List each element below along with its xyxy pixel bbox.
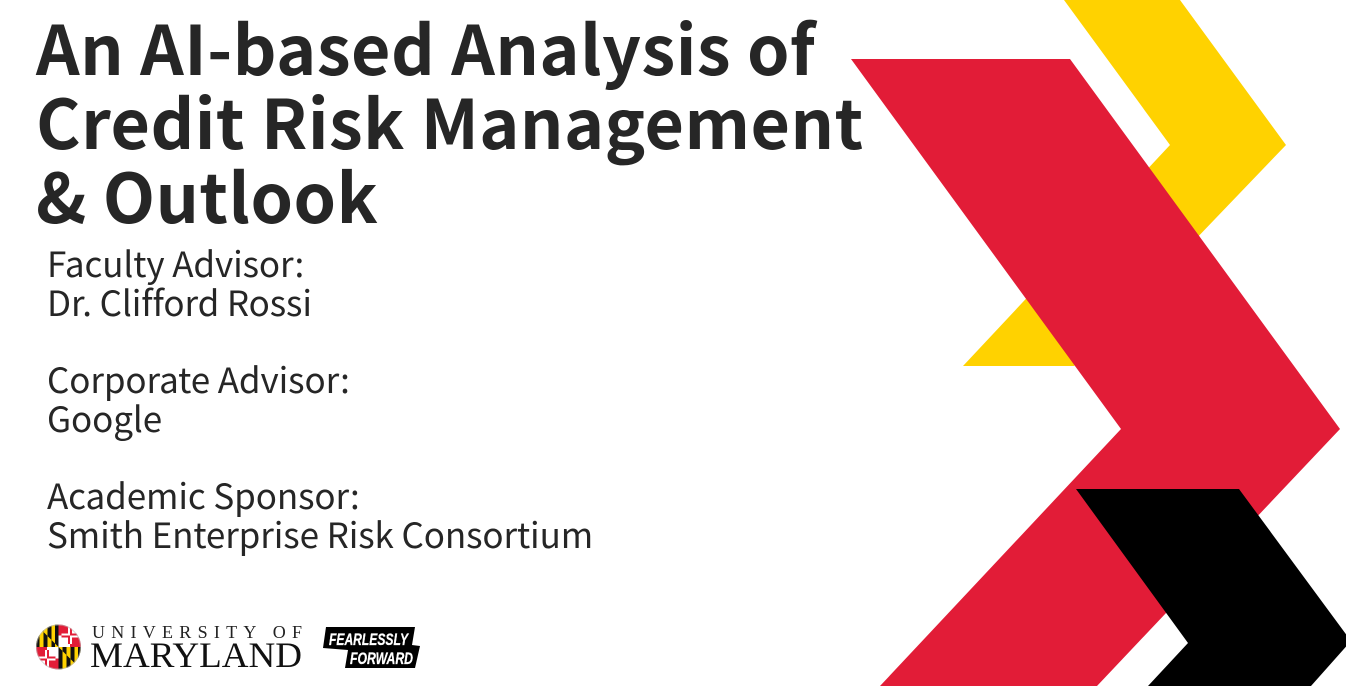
advisors and sponsor text: Smith Enterprise Risk Consortium	[47, 508, 593, 559]
badge: fearlessly forward: FORWARD	[350, 649, 413, 668]
title: Credit Risk Management	[36, 70, 864, 169]
wordmark: maryland: MARYLAND	[90, 635, 302, 675]
badge: fearlessly forward: FEARLESSLY	[329, 630, 409, 649]
advisors and sponsor text: Academic Sponsor:	[47, 469, 360, 520]
advisors and sponsor text: Google	[47, 392, 162, 443]
yellow chevron	[963, 0, 1286, 366]
wordmark: university of: UNIVERSITY OF	[92, 622, 302, 642]
university of maryland logo	[36, 624, 420, 670]
title	[36, 0, 864, 243]
title: & Outlook	[36, 144, 378, 243]
red chevron	[851, 59, 1340, 686]
advisors and sponsor text: Faculty Advisor:	[47, 237, 304, 288]
icon: maryland flag globe	[36, 624, 82, 670]
badge: fearlessly forward	[323, 627, 420, 668]
advisors and sponsor text	[47, 237, 593, 559]
black chevron	[1076, 489, 1346, 686]
advisors and sponsor text: Dr. Clifford Rossi	[47, 276, 312, 327]
advisors and sponsor text: Corporate Advisor:	[47, 353, 350, 404]
